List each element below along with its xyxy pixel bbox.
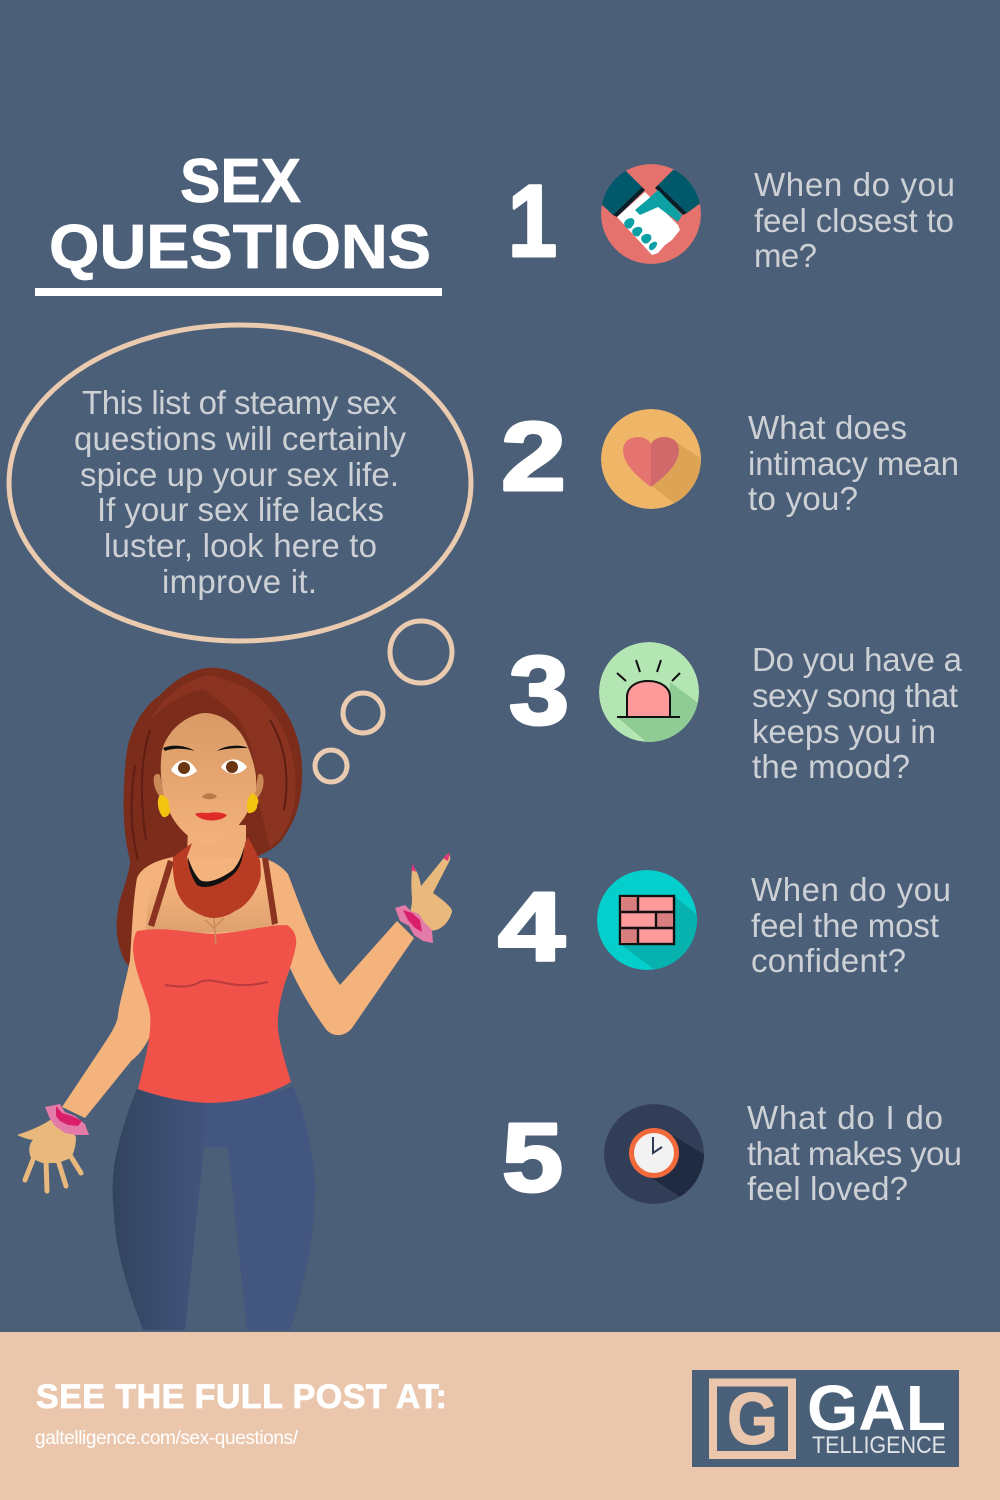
- footer band: [0, 1332, 1000, 1500]
- logo: G: [727, 1379, 778, 1460]
- item 1: me?: [754, 237, 817, 274]
- item 5: [504, 1104, 960, 1204]
- icon: siren: [599, 642, 699, 742]
- thought bubble: questions will certainly: [74, 420, 406, 457]
- title: SEX: [180, 147, 301, 216]
- item 4: confident?: [751, 942, 906, 979]
- item 1: 1: [508, 164, 557, 278]
- logo: [692, 1370, 959, 1467]
- icon: heart: [601, 409, 710, 510]
- item 5: feel loved?: [747, 1170, 908, 1207]
- item 2: to you?: [748, 480, 858, 517]
- item 3: [509, 636, 963, 785]
- item 4: 4: [498, 872, 565, 981]
- item 1: feel closest to: [754, 202, 954, 239]
- woman illustration: [17, 668, 452, 1330]
- item 2: What does: [748, 409, 907, 446]
- thought bubble: If your sex life lacks: [97, 491, 384, 528]
- item 3: Do you have a: [752, 641, 963, 678]
- item 4: [498, 870, 949, 972]
- icon: brick wall: [597, 870, 697, 970]
- icon: clock: [604, 1104, 710, 1204]
- item 3: sexy song that: [752, 677, 958, 714]
- item 2: [501, 402, 959, 517]
- thought bubble: spice up your sex life.: [80, 456, 399, 493]
- logo: GAL: [807, 1372, 946, 1444]
- item 3: 3: [509, 636, 569, 745]
- item 5: What do I do: [747, 1099, 943, 1136]
- thought bubble: improve it.: [162, 563, 317, 600]
- item 5: that makes you: [747, 1135, 962, 1172]
- item 3: the mood?: [752, 748, 910, 785]
- thought bubble: [9, 325, 471, 782]
- footer call to action: [35, 1378, 447, 1449]
- item 4: When do you: [751, 871, 951, 908]
- title: QUESTIONS: [49, 213, 431, 282]
- footer call to action: galtelligence.com/sex-questions/: [35, 1428, 299, 1449]
- item 5: 5: [502, 1103, 563, 1212]
- item 1: When do you: [754, 166, 955, 203]
- item 1: [512, 164, 953, 268]
- item 2: intimacy mean: [748, 445, 959, 482]
- icon: handshake: [600, 164, 702, 264]
- title: [35, 147, 442, 296]
- item 2: 2: [501, 402, 566, 511]
- thought bubble: luster, look here to: [104, 527, 377, 564]
- footer call to action: SEE THE FULL POST AT:: [36, 1378, 447, 1416]
- thought bubble: This list of steamy sex: [82, 384, 398, 421]
- item 4: feel the most: [751, 907, 939, 944]
- item 3: keeps you in: [752, 713, 936, 750]
- logo: TELLIGENCE: [812, 1432, 946, 1459]
